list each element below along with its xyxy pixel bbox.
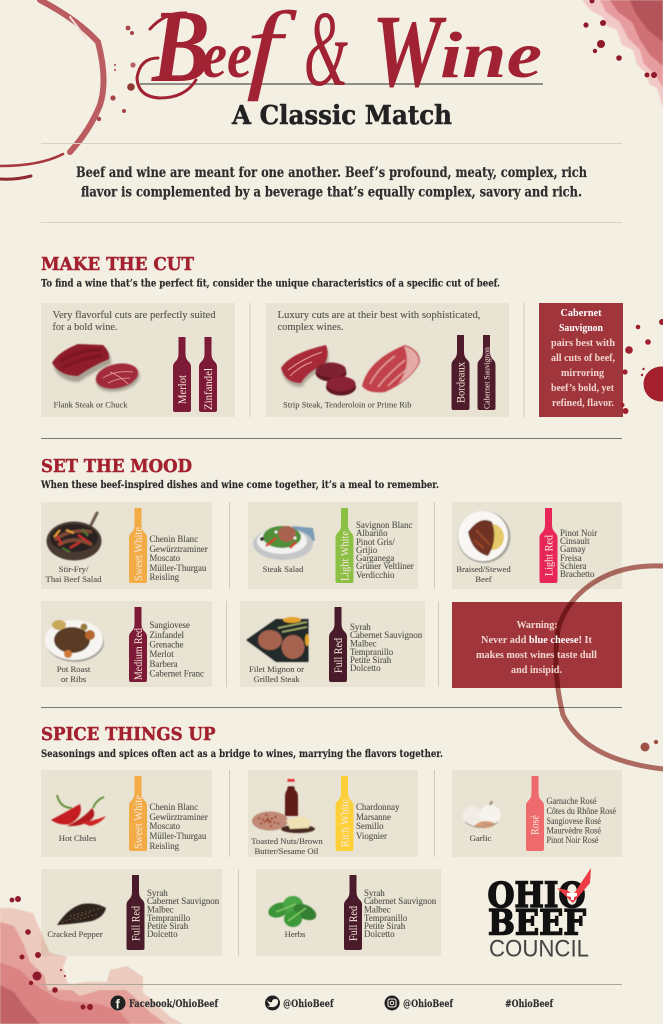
bottle: Full Red: Full Red	[348, 906, 360, 941]
panel: stir-fry	[41, 502, 212, 589]
icon: braised plate	[458, 511, 510, 563]
callout text: warning	[476, 620, 597, 676]
callout panel: warning	[452, 602, 622, 688]
wine list: Syrah	[364, 888, 385, 898]
wine list: Garganega	[356, 553, 394, 563]
icon: pot roast plate	[45, 620, 104, 662]
wine list: Gewürztraminer	[150, 812, 208, 822]
section rules	[41, 438, 622, 708]
wine list: Chardonnay	[356, 802, 400, 812]
bottle: Sweet White	[129, 508, 147, 583]
bottle: Rosé: Rosé	[530, 815, 542, 835]
bottle: Medium Red	[129, 607, 147, 682]
wine list: Pinot Noir Rosé	[546, 835, 599, 845]
wine list: Müller-Thurgau	[150, 563, 207, 573]
panel: steak salad: Steak Salad	[263, 564, 304, 574]
callout: cabernet sauvignon: refined, flavor.	[552, 398, 614, 409]
wine list: Moscato	[150, 553, 181, 563]
wine list: Cinsault	[560, 536, 590, 546]
wine list: Tempranillo	[364, 913, 408, 923]
wine list	[147, 888, 220, 939]
wine list: Cabernet Sauvignon	[364, 896, 437, 906]
wine list: Garnache Rosé	[546, 796, 597, 806]
wine list: Dolcetto	[364, 929, 395, 939]
panel: bold wine cuts: Flank Steak or Chuck	[54, 400, 128, 410]
panel: toasted nuts: Toasted Nuts/Brown	[251, 836, 323, 846]
wine list: Verdicchio	[356, 570, 395, 580]
dividers: spice row one	[230, 770, 434, 956]
icon: sesame oil bottle, nuts and butter	[252, 779, 315, 833]
subtitle: A Classic Match	[231, 101, 452, 131]
wine list: Marsanne	[356, 812, 391, 822]
wine list: Brachetto	[560, 569, 595, 579]
wine list: Petite Sirah	[147, 921, 189, 931]
panel: filet mignon: Grilled Steak	[253, 674, 300, 684]
bottle: Rosé	[526, 776, 544, 851]
callout text: warning: Never add blue cheese! It	[481, 635, 593, 646]
bottle: Bordeaux	[452, 335, 470, 410]
logo: Ohio Beef Council	[488, 868, 591, 962]
callout text: warning: makes most wines taste dull	[476, 650, 597, 661]
title: Beef & Wine: ine	[440, 19, 542, 92]
bottle: Medium Red: Medium Red	[133, 628, 145, 680]
wine list: Viognier	[356, 831, 387, 841]
wine list: Dolcetto	[147, 929, 178, 939]
logo: Ohio Beef Council: OHIO	[488, 875, 586, 916]
wine list	[356, 802, 400, 841]
wine blot: bottom left	[0, 908, 183, 1024]
panel: steak salad	[248, 502, 418, 589]
wine list: Cabernet Franc	[150, 668, 204, 678]
wine list: Petite Sirah	[364, 921, 406, 931]
callout: cabernet sauvignon: pairs best with	[551, 338, 615, 349]
wine list	[350, 622, 423, 673]
bottle: Full Red: Full Red	[130, 906, 142, 941]
wine list: Merlot	[150, 649, 174, 659]
panel: herbs: Herbs	[285, 929, 306, 939]
footer: instagram	[384, 996, 454, 1010]
panel: bold wine cuts: for a bold wine.	[52, 321, 118, 333]
wine list: Syrah	[147, 888, 168, 898]
panel: cracked pepper	[41, 869, 222, 956]
wine list: Pinot Gris/	[356, 537, 395, 547]
wine list: Sangiovese	[150, 620, 190, 630]
panel: stir-fry: Stir-Fry/	[59, 564, 89, 574]
footer: twitter	[265, 996, 334, 1010]
panel: braised beef: Braised/Stewed	[456, 564, 511, 574]
wine list: Moscato	[150, 821, 181, 831]
panel: pot roast	[41, 601, 212, 687]
logo: Ohio Beef Council: COUNCIL	[489, 936, 589, 962]
panel: hot chiles: Hot Chiles	[59, 833, 97, 843]
icon: skillet	[46, 513, 102, 560]
panel: luxury cuts: complex wines.	[278, 321, 344, 333]
wine list: Chenin Blanc	[150, 802, 198, 812]
footer: facebook	[110, 996, 219, 1012]
panel: herbs	[256, 869, 441, 956]
divider lines: intro	[41, 144, 622, 222]
wine list: Dolcetto	[350, 663, 381, 673]
footer: twitter: @OhioBeef	[283, 999, 334, 1010]
panel: filet mignon: Filet Mignon or	[249, 664, 304, 674]
panel: braised beef	[452, 502, 622, 589]
wine list: Reisling	[150, 572, 180, 582]
bottle: Light Red: Light Red	[544, 535, 556, 576]
wine droplets: top right	[583, 0, 657, 78]
wine list: Malbec	[364, 904, 391, 914]
wine list: Syrah	[350, 622, 371, 632]
icon: pepper pile	[57, 904, 106, 925]
icon: chiles	[51, 795, 106, 826]
subheading: set the mood: When these beef-inspired dishes and wine come together, it’s a meal to remember.	[40, 479, 439, 491]
icon: strip steak	[281, 345, 329, 387]
callout: cabernet sauvignon: all cuts of beef,	[551, 353, 615, 364]
bottle: Light White	[336, 508, 354, 583]
icon: prime rib	[362, 345, 420, 392]
bottle: Merlot: Merlot	[177, 374, 189, 404]
icon: chuck steak	[93, 360, 142, 395]
icon: garlic	[462, 801, 500, 828]
wine list	[150, 802, 208, 851]
bottle: Full Red	[329, 607, 347, 682]
bottle: Sweet White: Sweet White	[133, 527, 145, 581]
panel: pot roast: Pot Roast	[57, 664, 91, 674]
footer: facebook: f	[116, 996, 120, 1012]
wine droplets: right middle	[620, 319, 663, 414]
heading: make the cut: MAKE THE CUT	[41, 254, 195, 275]
icon: salad plate	[253, 526, 315, 560]
heading: set the mood: SET THE MOOD	[41, 456, 192, 477]
wine list: Malbec	[350, 638, 377, 648]
icon: tenderloin medallions	[316, 362, 356, 396]
panel: filet mignon	[240, 601, 425, 687]
heading: spice things up: SPICE THINGS UP	[41, 724, 216, 745]
bottle: Sweet White	[129, 776, 147, 851]
wine list: Barbera	[150, 659, 178, 669]
footer: facebook: Facebook/OhioBeef	[129, 999, 219, 1010]
wine list: Cabernet Sauvignon	[350, 630, 423, 640]
wine list: Schiera	[560, 561, 587, 571]
callout: cabernet sauvignon: mirroring	[561, 368, 604, 379]
wine list: Reisling	[150, 841, 180, 851]
wine list: Grüner Veltliner	[356, 561, 414, 571]
intro text	[76, 165, 587, 200]
wine list	[364, 888, 437, 939]
wine list: Côtes du Rhône Rosé	[546, 806, 616, 816]
wine list	[150, 534, 208, 582]
wine list: Tempranillo	[350, 647, 394, 657]
panel: pot roast: or Ribs	[61, 674, 87, 684]
wine list: Petite Sirah	[350, 655, 392, 665]
logo: Ohio Beef Council: BEEF	[488, 902, 586, 944]
callout: cabernet sauvignon: beef’s bold, yet	[551, 383, 615, 394]
panel: luxury cuts	[266, 303, 509, 417]
wine list	[150, 620, 204, 678]
panel: garlic	[452, 770, 622, 857]
title: Beef & Wine: ee	[202, 19, 252, 92]
wine droplets: bottom left	[10, 896, 93, 1010]
panel: toasted nuts	[248, 770, 418, 857]
wine ring stain: top left	[0, 0, 136, 179]
icon: flank steak	[52, 344, 111, 382]
panel: luxury cuts: Luxury cuts are at their best with sophisticated,	[278, 309, 481, 321]
wine list: Zinfandel	[150, 630, 185, 640]
panel: stir-fry: Thai Beef Salad	[46, 574, 102, 584]
bottle: Zinfandel	[199, 337, 217, 412]
panel: garlic: Garlic	[470, 833, 491, 843]
wine list: Grenache	[150, 640, 184, 650]
wine list	[560, 528, 597, 579]
dividers: make the cut	[250, 303, 524, 417]
bottle: Rich White: Rich White	[340, 799, 352, 847]
wine ring stain: lower right	[556, 566, 663, 769]
bottle: Merlot	[173, 337, 191, 412]
panel: toasted nuts: Butter/Sesame Oil	[255, 846, 319, 856]
panel: bold wine cuts	[41, 303, 235, 417]
wine list: Tempranillo	[147, 913, 191, 923]
callout text: warning: and insipid.	[511, 665, 562, 676]
subheading: spice things up: Seasonings and spices often act as a bridge to wines, marrying the flavors together.	[41, 748, 443, 760]
wine list	[356, 520, 414, 580]
panel: hot chiles	[41, 770, 212, 857]
wine blot: top right	[582, 0, 663, 108]
wine list: Semillo	[356, 821, 384, 831]
intro text: flavor is complemented by a beverage that’s equally complex, savory and rich.	[81, 184, 582, 200]
panel: braised beef: Beef	[475, 574, 492, 584]
bottle: Sweet White: Sweet White	[133, 795, 145, 849]
bottle: Cabernet Sauvignon	[478, 335, 496, 410]
wine list: Pinot Noir	[560, 528, 597, 538]
title: Beef & Wine	[137, 0, 543, 109]
bottle: Rich White	[336, 776, 354, 851]
bottle: Light Red	[540, 508, 558, 583]
bottle: Full Red	[344, 875, 362, 950]
wine list: Malbec	[147, 904, 174, 914]
wine list: Müller-Thurgau	[150, 831, 207, 841]
wine list: Grijio	[356, 545, 378, 555]
wine list: Albariño	[356, 528, 388, 538]
panel: luxury cuts: Strip Steak, Tenderoloin or Prime Rib	[283, 400, 412, 410]
callout: cabernet sauvignon: Cabernet	[560, 308, 602, 319]
wine list: Gewürztraminer	[150, 544, 208, 554]
wine list: Savignon Blanc	[356, 520, 413, 530]
wine list	[546, 796, 616, 845]
icon: grilled steak	[246, 617, 309, 662]
icon: herbs	[266, 896, 319, 927]
wine list: Sangiovese Rosé	[546, 816, 601, 826]
callout: cabernet sauvignon	[539, 303, 623, 417]
bottle: Full Red: Full Red	[333, 638, 345, 673]
wine list: Maurvèdre Rosé	[546, 826, 601, 836]
wine list: Chenin Blanc	[150, 534, 198, 544]
wine list: Freisa	[560, 553, 582, 563]
bottle: Bordeaux: Bordeaux	[456, 362, 468, 403]
dividers: set the mood	[226, 502, 438, 687]
callout: cabernet sauvignon: Sauvignon	[559, 323, 603, 334]
wine list: Cabernet Sauvignon	[147, 896, 220, 906]
panel: bold wine cuts: Very flavorful cuts are perfectly suited	[52, 309, 216, 321]
footer: hashtag: #OhioBeef	[505, 999, 554, 1010]
bottle: Full Red	[126, 875, 144, 950]
bottle: Cabernet Sauvignon: Cabernet Sauvignon	[482, 347, 492, 409]
footer rule	[41, 984, 622, 986]
bottle: Zinfandel: Zinfandel	[203, 368, 215, 410]
subheading: make the cut: To find a wine that’s the perfect fit, consider the unique characteristics of a specific cut of beef.	[41, 278, 500, 290]
icon: red check mark	[557, 868, 591, 903]
bottle: Light White: Light White	[340, 531, 352, 581]
callout text: warning: Warning:	[516, 620, 558, 631]
footer: instagram: @OhioBeef	[403, 999, 454, 1010]
panel: cracked pepper: Cracked Pepper	[47, 929, 103, 939]
wine list: Gamay	[560, 544, 586, 554]
